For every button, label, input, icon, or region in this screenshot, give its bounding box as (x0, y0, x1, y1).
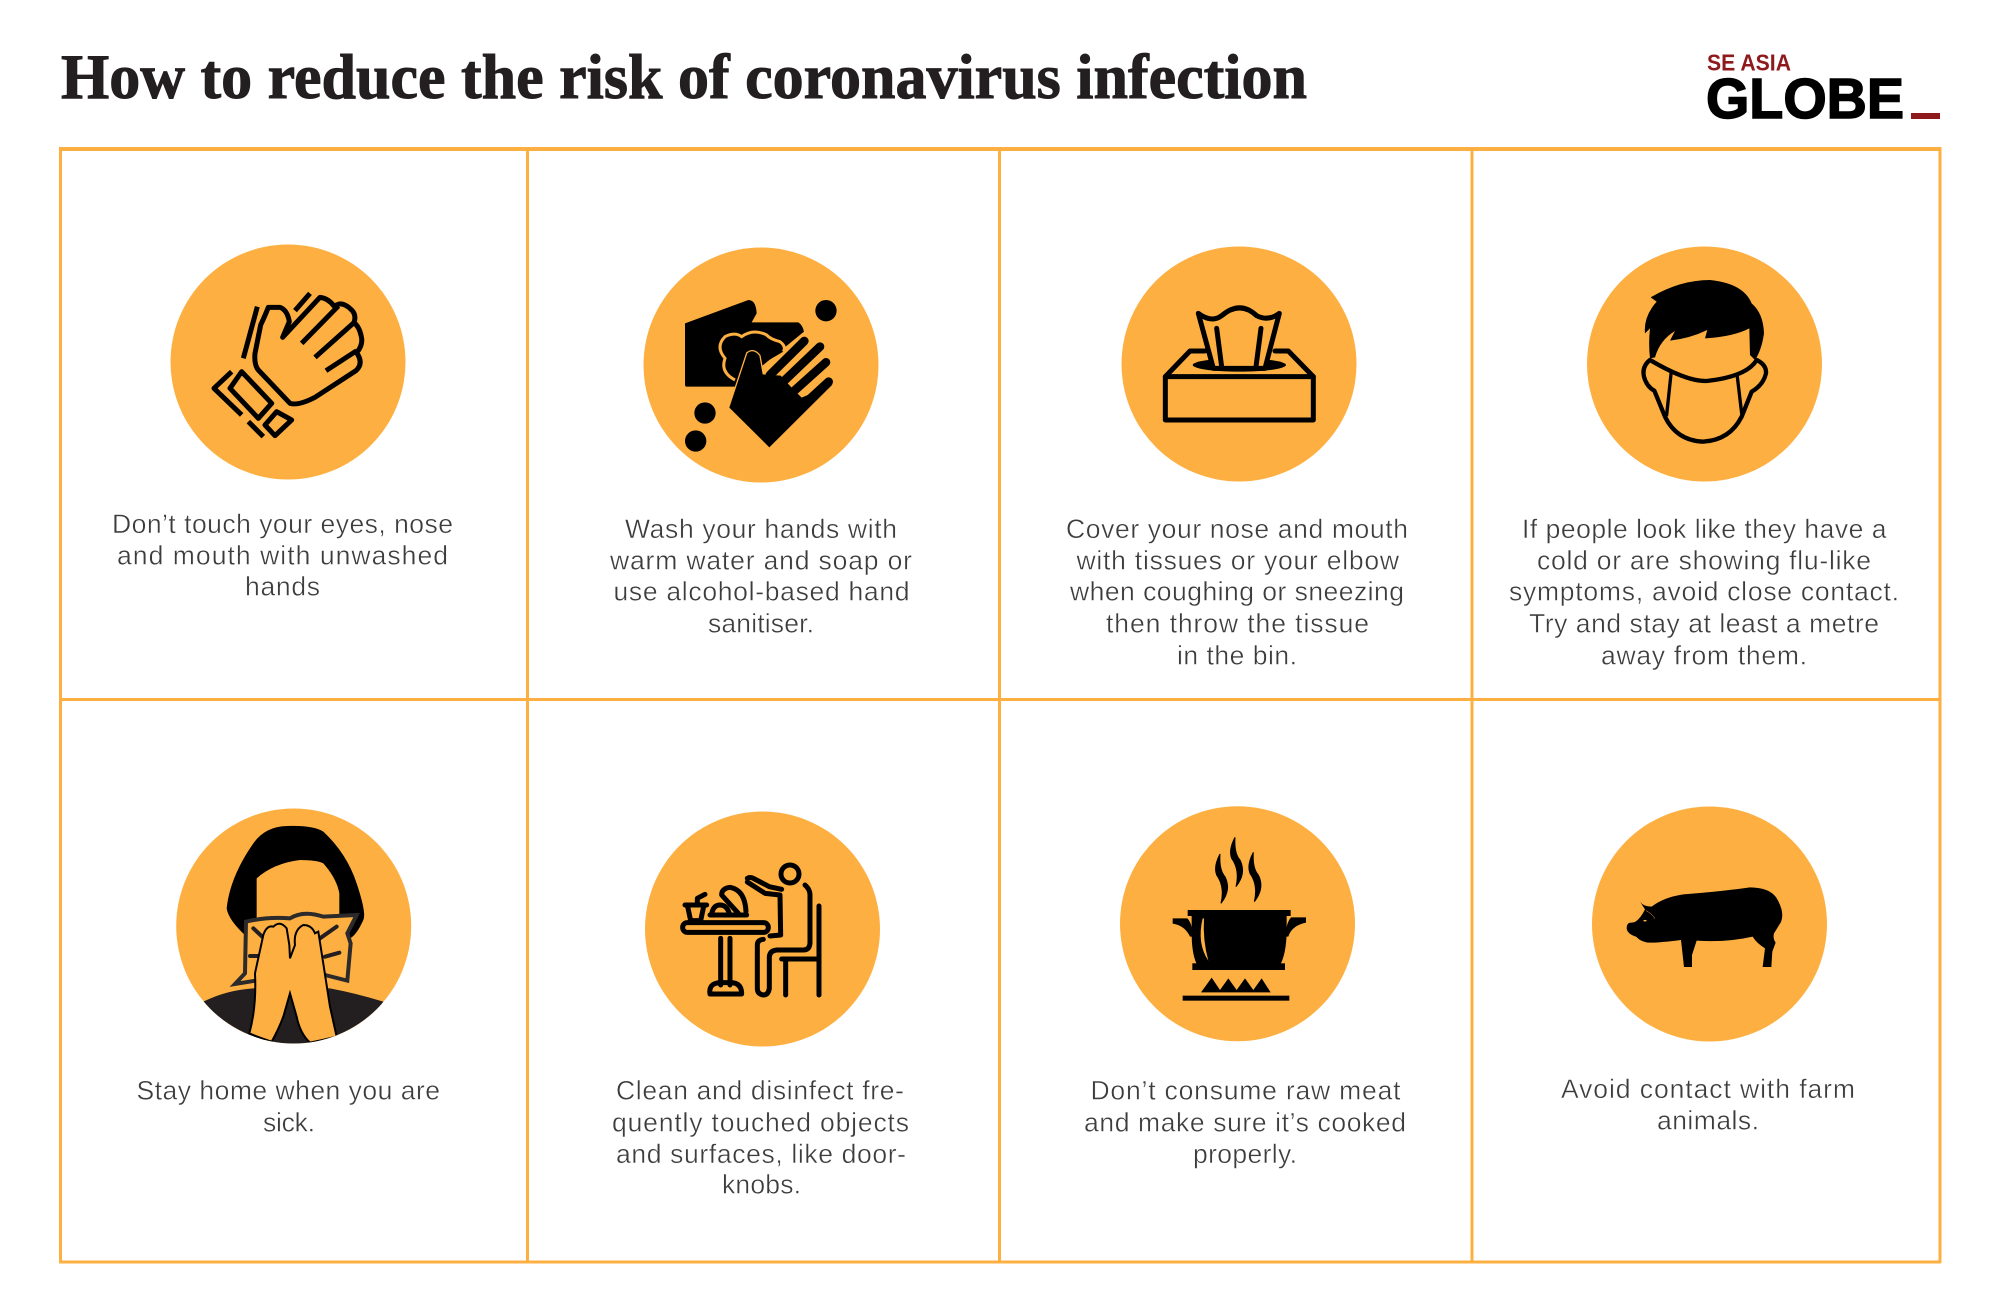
logo: SE Asia Globe: SE ASIA (1707, 50, 1791, 76)
text: wash hands (609, 514, 912, 639)
icon: hand and wristwatch (170, 244, 406, 480)
panel: stay home when sick (138, 808, 439, 1132)
panel: avoid close contact (1473, 150, 1939, 699)
text: avoid close contact: If people look like they have a (1522, 514, 1887, 544)
text: avoid close contact: cold or are showing flu-like (1537, 546, 1871, 576)
text: stay home: Stay home when you are (136, 1076, 440, 1106)
icon: person at table (645, 812, 880, 1046)
text: wash hands: sanitiser. (708, 609, 814, 639)
text: avoid close contact: away from them. (1601, 641, 1807, 671)
grid frame (59, 147, 1942, 1264)
text: farm animals: animals. (1657, 1106, 1759, 1136)
icon: tissue box (1122, 246, 1356, 482)
text: wash hands: warm water and soap or (609, 546, 912, 576)
text: cook properly: Don’t consume raw meat (1090, 1076, 1401, 1106)
panel: don't touch your face (62, 150, 527, 699)
text: clean and disinfect: quently touched objects (612, 1108, 909, 1138)
text: farm animals: Avoid contact with farm (1561, 1074, 1855, 1104)
text: don't touch: Don’t touch your eyes, nose (112, 509, 453, 539)
text: cover nose and mouth (1066, 514, 1408, 671)
panel: cover your nose and mouth (1001, 150, 1471, 699)
text: cover nose and mouth: when coughing or sneezing (1069, 577, 1404, 607)
text: avoid close contact: symptoms, avoid close contact. (1509, 577, 1899, 607)
icon: steaming pot on burner (1120, 806, 1355, 1041)
panel: wash your hands (529, 150, 999, 699)
logo: SE Asia Globe (1706, 50, 1940, 131)
text: clean and disinfect: and surfaces, like door- (616, 1139, 906, 1169)
text: cook properly (1084, 1076, 1406, 1169)
icon: pig (1592, 806, 1827, 1042)
panel: avoid farm animals (1473, 701, 1939, 1261)
text: don't touch: and mouth with unwashed (117, 540, 448, 570)
text: cover nose and mouth: then throw the tissue (1106, 609, 1369, 639)
text: stay home: sick. (263, 1108, 315, 1138)
text: clean and disinfect (612, 1076, 909, 1200)
text: cover nose and mouth: in the bin. (1177, 641, 1297, 671)
text: avoid close contact (1509, 514, 1899, 671)
panel: cook meat properly (1001, 701, 1471, 1261)
panel: clean and disinfect (529, 701, 999, 1261)
icon: hand washing with foam (644, 248, 878, 482)
text: clean and disinfect: Clean and disinfect fre- (616, 1076, 904, 1106)
text: don't touch: hands (245, 572, 320, 602)
title: How to reduce the risk of coronavirus infection (61, 41, 1307, 112)
text: wash hands: use alcohol-based hand (614, 577, 910, 607)
text: don't touch (112, 509, 453, 602)
text: cook properly: properly. (1193, 1139, 1297, 1169)
text: avoid close contact: Try and stay at least a metre (1529, 609, 1879, 639)
text: cover nose and mouth: Cover your nose and mouth (1066, 514, 1408, 544)
icon: man with face mask (1587, 246, 1822, 482)
icon: person blowing nose (176, 808, 411, 1053)
text: farm animals (1561, 1074, 1855, 1136)
logo: SE Asia Globe: GLOBE (1706, 67, 1904, 131)
text: clean and disinfect: knobs. (722, 1170, 801, 1200)
text: wash hands: Wash your hands with (625, 514, 897, 544)
text: cook properly: and make sure it’s cooked (1084, 1108, 1406, 1138)
text: stay home (136, 1076, 440, 1138)
text: cover nose and mouth: with tissues or your elbow (1076, 546, 1400, 576)
